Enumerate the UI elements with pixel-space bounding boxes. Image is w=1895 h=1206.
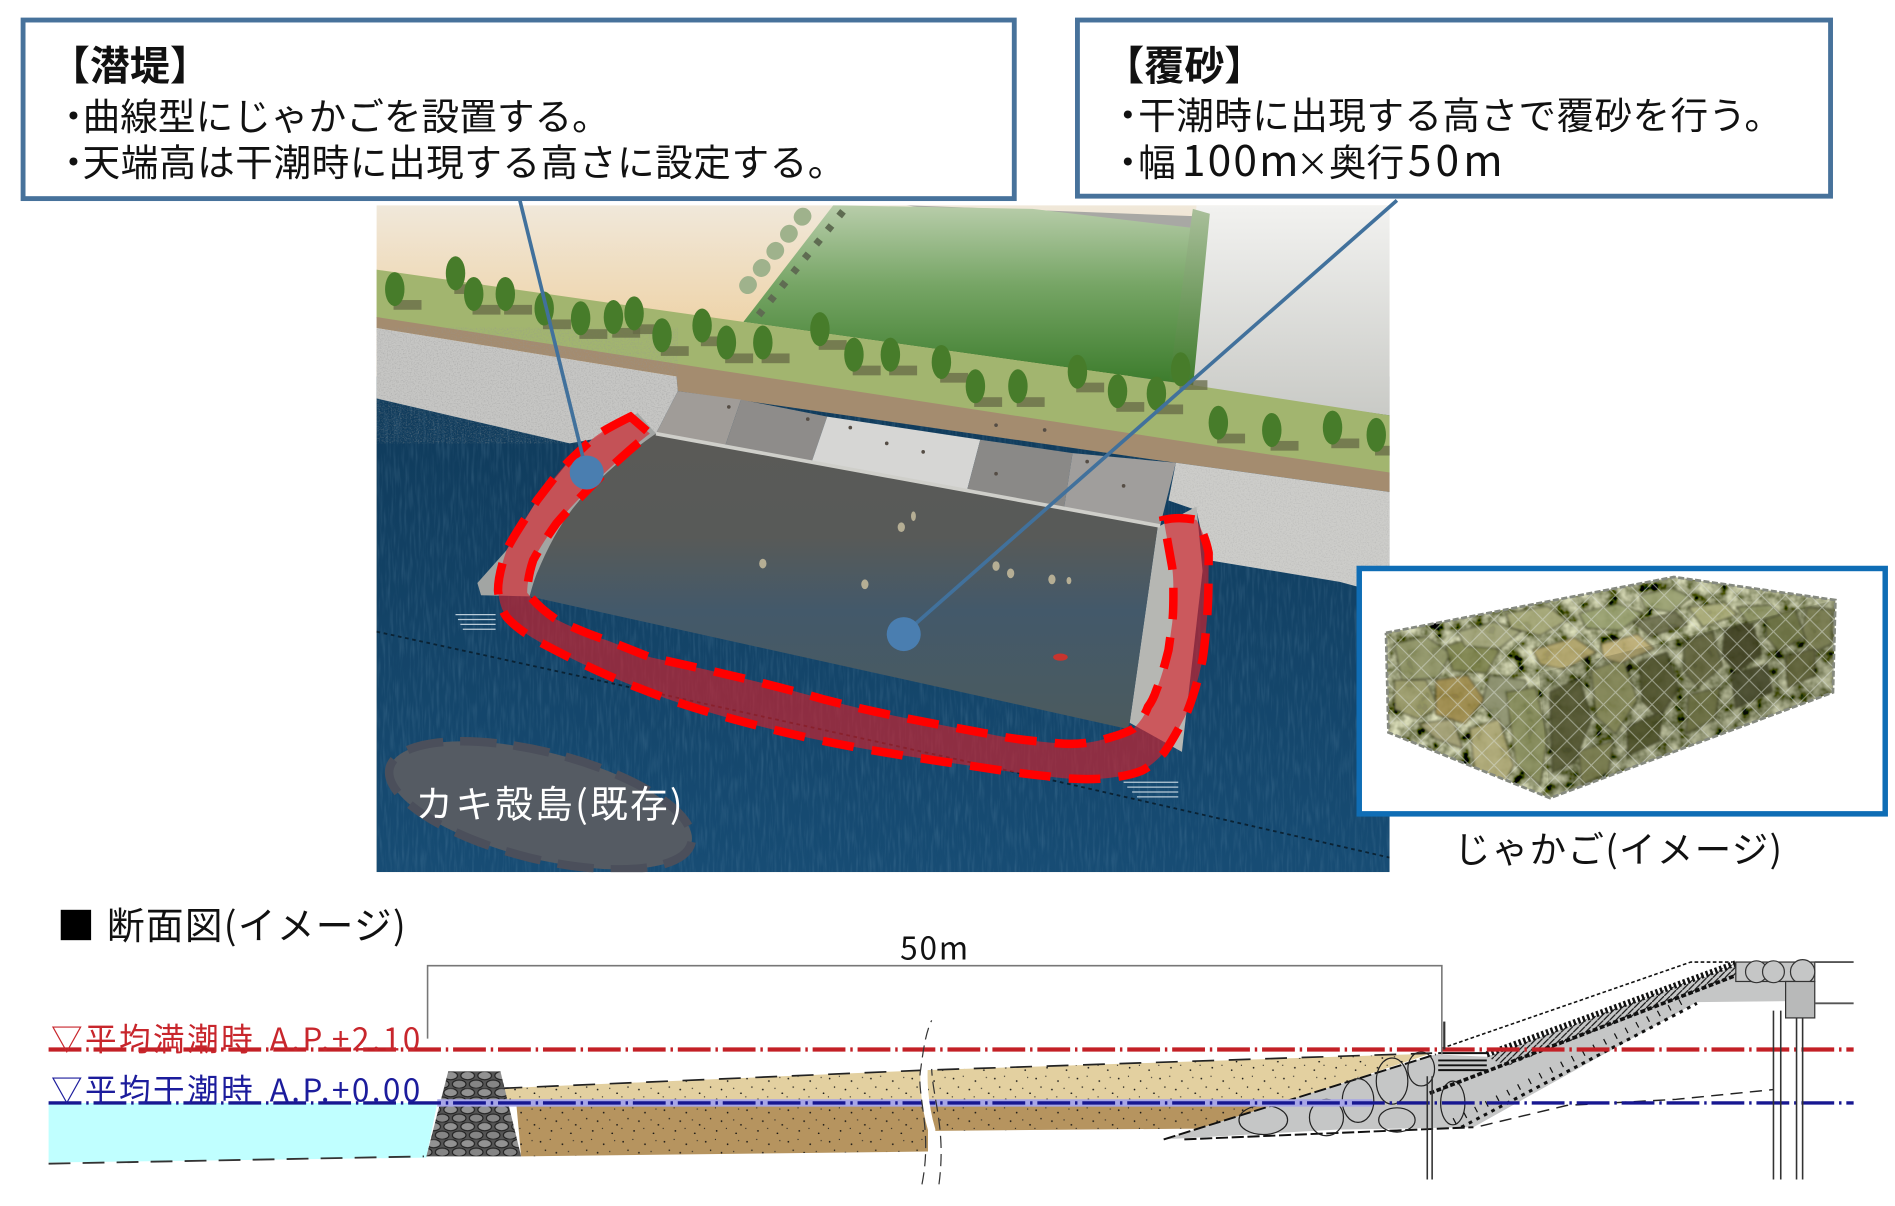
people on sand flat [759,511,1071,661]
sea [377,377,1390,872]
lower sand layer [516,1103,1283,1156]
piles [1427,1011,1803,1179]
marker dot: sand [887,617,921,651]
label: mean low tide: ▽平均干潮時 [51,1066,253,1112]
dimension label: 50m: 50m [900,924,968,970]
bullet text 2: × [1296,139,1329,186]
callout: 潜堤 [23,20,1014,199]
bullet text 2: ・ [1109,132,1147,187]
panel: gabion photo [1359,568,1885,814]
rubble mound and slope [1164,960,1854,1139]
bullet text 2: 50m [1408,128,1503,189]
heading: 潜堤: 【潜堤】 [50,34,210,92]
label: mean low tide: A.P.+0.00 [270,1066,420,1112]
offshore dotted line [377,632,1390,858]
rubble toe dashed line [1481,1090,1773,1126]
right seawall [1169,463,1390,595]
icon: gabion stone basket [1373,571,1846,808]
bullet text 2: 天端高は干潮時に出現する高さに設定する。 [83,132,845,187]
dimension line [428,966,1442,1054]
break mark [920,1020,941,1184]
mean low tide line [49,1100,1854,1106]
bullet text 1: 曲線型にじゃかごを設置する。 [83,86,610,141]
bullet dots: ・ [55,86,92,141]
wave marks [456,615,1178,797]
stair block [1438,1053,1487,1070]
leader line to submerged breakwater [520,200,587,473]
callout: 覆砂 [1077,20,1831,196]
side wedges [477,413,1203,752]
sand flat (覆砂) [530,434,1158,729]
bullet text 2: 100m [1182,128,1299,189]
bullet text 2: 幅 [1138,132,1176,187]
heading: cross section: 断面図(イメージ) [107,895,406,950]
green field [736,205,1210,389]
armour slope [1487,963,1736,1054]
red dashed zone: submerged breakwater [498,417,1209,779]
label: mean high tide [51,1015,420,1061]
promenade tiles [656,391,1176,526]
mean high tide line [49,1048,1854,1051]
bullet dots: ・ [1109,85,1147,140]
marker dot: breakwater [570,456,604,490]
leader line to sand cover [904,200,1397,634]
panel: 3D scene of beach [377,205,1403,895]
heading: 覆砂: 【覆砂】 [1104,34,1264,92]
bullet text 2: 奥行 [1329,132,1404,187]
bullet dots 2: ・ [55,132,92,187]
trees [385,256,1403,456]
bullet text 2 [1109,128,1503,189]
label: mean high tide: ▽平均満潮時 [51,1015,253,1061]
oyster shell island [377,716,704,895]
cross section diagram [49,924,1854,1184]
water [49,1103,437,1162]
dashed seabed line [49,1156,424,1164]
grass strip [377,270,1390,476]
background: grey land right [1184,205,1390,415]
bullet text 1: 干潮時に出現する高さで覆砂を行う。 [1138,85,1782,140]
stone gabion breakwater [426,1071,521,1156]
upper sand layer [500,1053,1432,1103]
label: mean low tide [51,1066,420,1112]
label: mean high tide: A.P.+2.10 [270,1015,420,1061]
caption: gabion: じゃかご(イメージ) [1454,821,1782,873]
brown path [377,317,1390,492]
karaki label: カキ殻島(既存) [415,773,683,828]
left seawall [377,328,678,443]
crest block [1736,960,1854,1018]
